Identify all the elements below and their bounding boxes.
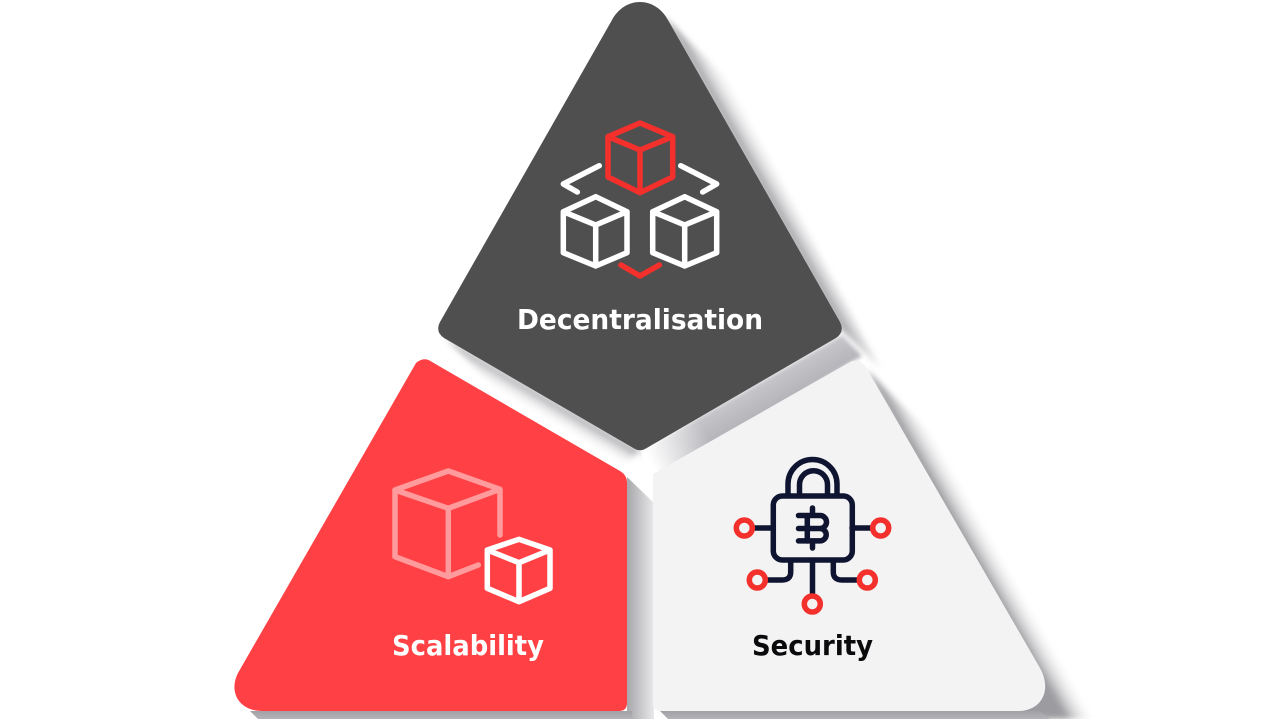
heading: Decentralisation: Decentralisation (517, 304, 763, 336)
heading: Scalability: Scalability (392, 630, 544, 662)
icon: network of blocks (563, 123, 717, 276)
icon: small and large block (395, 471, 550, 602)
panel: Scalability (234, 359, 627, 711)
icon: bitcoin padlock with circuit nodes (736, 460, 889, 612)
panel: Decentralisation (438, 2, 842, 450)
heading: Security: Security (752, 630, 873, 662)
long shadows behind the panels (250, 16, 1094, 719)
panel: Security (653, 361, 1045, 711)
